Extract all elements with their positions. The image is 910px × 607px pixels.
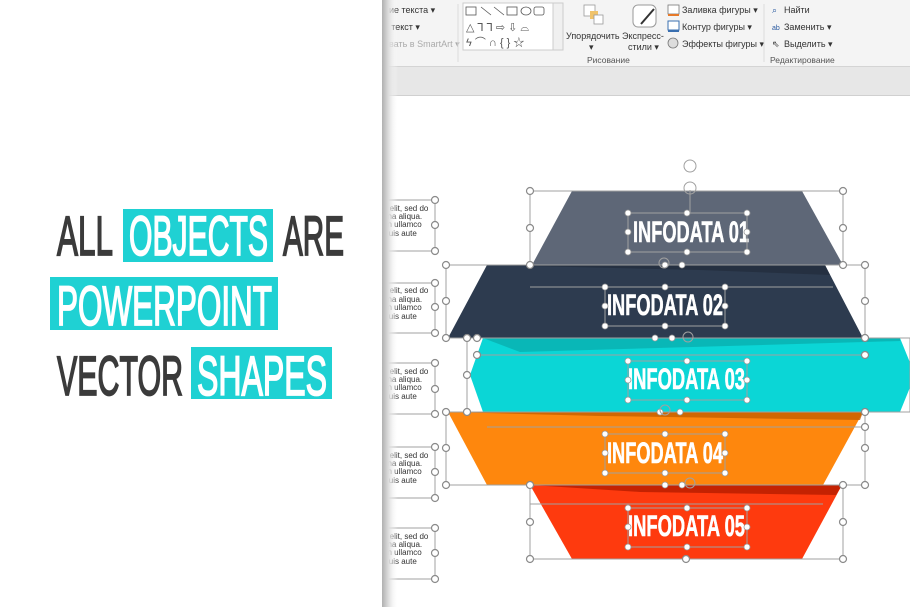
left description text boxes: Duis aute [383,229,417,238]
left description text boxes: g elit, sed do [383,286,429,295]
headline: VECTOR [57,344,183,407]
shapes gallery: ϟ ⌒ ∩ { } ☆ [466,36,524,49]
left description text boxes: g elit, sed do [383,451,429,460]
headline: OBJECTS [129,204,268,267]
left description text boxes: gna aliqua. [383,459,422,468]
editing commands: Выделить ▾ [784,39,833,49]
left description text boxes: on ullamco [383,467,422,476]
editing commands: Редактирование [770,55,835,65]
arrange / styles buttons: Упорядочить [566,31,620,41]
editing commands: ⇖ [772,39,780,49]
editing commands [770,5,835,65]
shape 2: navy trapezoid [448,265,863,338]
shape 1: gray trapezoid: INFODATA 01 [633,216,749,249]
editing commands: Заменить ▾ [784,22,832,32]
shape 4: orange trapezoid: INFODATA 04 [607,437,723,470]
shape format commands: Контур фигуры ▾ [682,22,752,32]
left description text boxes: Duis aute [383,392,417,401]
ribbon toolbar [382,0,910,96]
ribbon toolbar: ь текст ▾ [384,22,420,32]
headline: ALL [57,204,113,267]
editing commands: Найти [784,5,810,15]
page edge shadow [382,0,398,607]
left description text boxes: Duis aute [383,557,417,566]
left description text boxes: gna aliqua. [383,212,422,221]
shape 5: red trapezoid: INFODATA 05 [628,510,745,543]
selection frames and handles [442,160,910,562]
left description text boxes: on ullamco [383,383,422,392]
editing commands: ab [772,25,780,32]
left description text boxes: gna aliqua. [383,295,422,304]
arrange / styles buttons: стили ▾ [628,42,659,52]
shape format commands [668,5,765,49]
ribbon toolbar: овать в SmartArt ▾ [384,39,460,49]
left description text boxes: on ullamco [383,548,422,557]
editing commands: ⌕ [772,5,777,15]
headline: SHAPES [197,344,327,407]
ribbon toolbar: Рисование [587,55,630,65]
shape 2: navy trapezoid: INFODATA 02 [607,289,723,322]
shapes gallery [463,3,563,50]
shape 5: red trapezoid [530,485,842,559]
shape 4: orange trapezoid [448,412,863,485]
headline [50,204,344,407]
shape format commands: Заливка фигуры ▾ [682,5,758,15]
left description text boxes [382,196,438,582]
left description text boxes: Duis aute [383,312,417,321]
left description text boxes: Duis aute [383,476,417,485]
left description text boxes: gna aliqua. [383,375,422,384]
left description text boxes: g elit, sed do [383,367,429,376]
arrange / styles buttons [566,5,664,52]
shape 1: gray trapezoid [532,191,843,265]
shape format commands: Эффекты фигуры ▾ [682,39,765,49]
arrange / styles buttons: ▾ [589,42,594,52]
shape 3: teal hexagon: INFODATA 03 [628,363,745,396]
left description text boxes: gna aliqua. [383,540,422,549]
left description text boxes: g elit, sed do [383,532,429,541]
shape 3: teal hexagon [470,338,910,412]
left description text boxes: g elit, sed do [383,204,429,213]
headline: POWERPOINT [57,274,272,337]
headline: ARE [283,204,344,267]
shapes gallery: △ ⅂ ⅂ ⇨ ⇩ ⌓ [466,22,529,34]
left description text boxes: on ullamco [383,220,422,229]
left description text boxes: on ullamco [383,303,422,312]
arrange / styles buttons: Экспресс- [622,31,664,41]
ribbon toolbar: ние текста ▾ [384,5,436,15]
